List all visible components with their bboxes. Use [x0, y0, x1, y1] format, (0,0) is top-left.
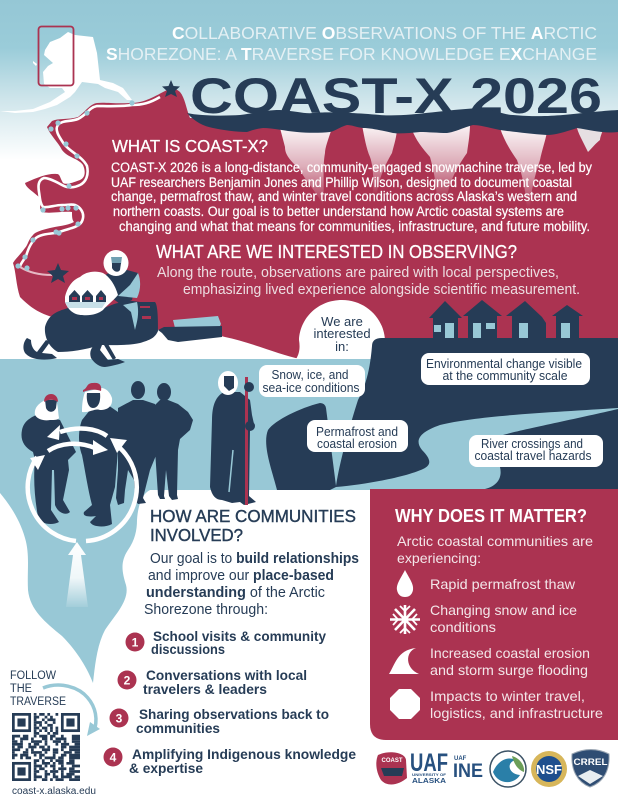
group of people	[21, 371, 256, 526]
logo: UAF: ALASKA	[412, 778, 446, 785]
list item 1: discussions	[151, 641, 225, 657]
text: observing body: Along the route, observations are paired with local perspectives,	[157, 264, 559, 281]
red land mass	[13, 89, 618, 359]
callout: permafrost: Permafrost and	[316, 424, 398, 439]
machine windshield	[65, 272, 118, 315]
text: snow and ice: Changing snow and ice	[430, 602, 577, 618]
list item 2	[118, 667, 307, 697]
icon: star, south end	[47, 263, 69, 283]
text: follow the traverse: FOLLOW	[10, 670, 56, 682]
heading: what are we interested in observing: WHAT ARE WE INTERESTED IN OBSERVING?	[156, 241, 517, 262]
blue lower ground and ice	[0, 359, 380, 683]
text: why intro	[397, 533, 593, 566]
callout: environmental change	[421, 353, 590, 385]
windshield stripe	[65, 302, 106, 308]
list item 1: School visits & community	[153, 628, 326, 644]
text: follow the traverse: THE	[10, 683, 32, 695]
text: snow and ice: conditions	[430, 619, 496, 635]
callout: snow ice	[259, 365, 365, 397]
text: what is coast-x body: COAST-X 2026 is a long-distance, community-engaged snowmachine traverse, led by	[111, 160, 592, 175]
up arrow	[66, 542, 88, 607]
heading: what is coast-x: WHAT IS COAST-X?	[112, 136, 268, 156]
icon: wave	[389, 648, 419, 674]
callout: permafrost	[307, 420, 408, 452]
navy wave band	[187, 108, 618, 135]
speech bubble: we are interested in: We are	[321, 314, 363, 329]
sky background	[0, 0, 618, 160]
logo: NSF: NSF	[536, 762, 562, 777]
list item 3: Sharing observations back to	[139, 706, 329, 722]
text: what is coast-x body: change, permafrost thaw, and winter travel conditions across Alaska’s western and	[111, 189, 577, 204]
arrow: to qr code	[43, 685, 100, 736]
logo: UAF	[410, 749, 448, 785]
heading: how are communities involved	[150, 506, 356, 545]
text: what is coast-x body: changing and what that means for communities, infrastructure, and future mobility.	[119, 219, 590, 234]
subtitle: SHOREZONE: A TRAVERSE FOR KNOWLEDGE EXCHANGE	[106, 44, 597, 64]
logo: UAF: UNIVERSITY OF	[412, 772, 447, 777]
list item 3	[110, 706, 329, 736]
text: follow the traverse	[10, 670, 66, 708]
icon: stop sign octagon	[390, 689, 420, 719]
logo: NSF	[531, 751, 567, 787]
list item 2: travelers & leaders	[143, 681, 267, 697]
qr code	[12, 714, 80, 780]
callout: snow ice: Snow, ice, and	[272, 367, 348, 382]
panel: why does it matter	[370, 489, 618, 740]
text: snow and ice	[430, 602, 577, 635]
text: coastal erosion: Increased coastal erosion	[430, 645, 590, 661]
list item 3: 3	[116, 712, 123, 726]
heading: how are communities involved: INVOLVED?	[150, 525, 243, 545]
list item 4: 4	[110, 750, 117, 764]
text: winter travel: Impacts to winter travel,	[430, 688, 585, 704]
text: permafrost thaw: Rapid permafrost thaw	[430, 576, 576, 592]
logo: CRREL	[572, 750, 609, 787]
text: winter travel	[430, 688, 603, 721]
list item 4: Amplifying Indigenous knowledge	[132, 746, 356, 762]
list item 2: Conversations with local	[146, 667, 307, 683]
text: observing body	[157, 264, 580, 298]
text: goal paragraph: Shorezone through:	[144, 601, 268, 618]
houses	[429, 300, 583, 338]
speech bubble: we are interested in	[296, 300, 385, 359]
text: goal paragraph	[144, 550, 359, 618]
text: goal paragraph: and improve our place-based	[148, 567, 334, 584]
logo: INE: INE	[453, 761, 483, 782]
person 2	[79, 383, 118, 526]
logo: CRREL: CRREL	[574, 757, 608, 768]
text: observing body: emphasizing lived experience alongside scientific measurement.	[183, 281, 580, 298]
qr caption: coast-x.alaska.edu	[12, 786, 96, 797]
text: what is coast-x body	[111, 160, 592, 234]
logo: coast-x: COAST	[382, 758, 403, 764]
text: why intro: experiencing:	[397, 550, 481, 566]
heading: how are communities involved: HOW ARE COMMUNITIES	[150, 506, 356, 526]
logo: UAF: UAF	[410, 749, 448, 777]
text: why intro: Arctic coastal communities are	[397, 533, 593, 549]
text: coastal erosion: and storm surge flooding	[430, 662, 588, 678]
text: what is coast-x body: northern coasts. Our goal is to better understand how Arctic coastal systems are	[113, 204, 564, 219]
panel: how are communities involved	[104, 506, 359, 776]
rider	[102, 250, 140, 330]
text: goal paragraph: Our goal is to build relationships	[150, 550, 359, 567]
person 4	[150, 383, 193, 500]
text: winter travel: logistics, and infrastructure	[430, 705, 603, 721]
list item 1: 1	[132, 636, 139, 650]
text: goal paragraph: understanding of the Arctic	[146, 584, 325, 601]
callout: snow ice: sea-ice conditions	[262, 380, 360, 395]
subtitle	[106, 23, 597, 64]
small houses on windshield	[69, 290, 106, 302]
machine body	[45, 300, 158, 352]
console lines	[140, 306, 151, 319]
river	[330, 408, 618, 490]
callout: environmental change: Environmental change visible	[426, 356, 582, 371]
main title: COAST-X 2026	[190, 68, 602, 124]
subtitle: COLLABORATIVE OBSERVATIONS OF THE ARCTIC	[172, 23, 597, 43]
machine skis	[23, 338, 125, 367]
text: what is coast-x body: UAF researchers Benjamin Jones and Phillip Wilson, designed to document coastal	[111, 175, 572, 190]
person 5 with pole	[210, 371, 256, 505]
icon: star, north end	[162, 80, 180, 97]
person 1	[21, 394, 76, 524]
logo: circular wave seal	[490, 751, 526, 787]
callout: river crossings: coastal travel hazards	[474, 448, 592, 463]
list item 2: 2	[124, 674, 131, 688]
person 3	[116, 381, 158, 505]
text: follow the traverse: TRAVERSE	[10, 696, 66, 708]
sled	[158, 316, 222, 342]
route across the coast	[15, 97, 160, 275]
text: coastal erosion	[430, 645, 590, 678]
speech bubble: we are interested in: interested	[313, 326, 371, 341]
exchange arrows circle	[28, 425, 137, 541]
list item 4	[104, 746, 356, 776]
icon: Alaska map	[0, 26, 132, 113]
list item 1	[126, 628, 326, 657]
callout: river crossings	[469, 435, 603, 467]
ice wedges under band	[280, 124, 547, 208]
logo: coast-x	[376, 752, 407, 784]
heading: why does it matter: WHY DOES IT MATTER?	[395, 506, 587, 526]
callout: river crossings: River crossings and	[481, 436, 583, 451]
icon: snowflake	[390, 605, 420, 634]
navy shoreline land	[266, 338, 618, 490]
icon: water drop	[397, 570, 413, 597]
snowmachine and rider	[23, 250, 222, 367]
logo: INE: UAF	[454, 756, 467, 762]
callout: permafrost: coastal erosion	[317, 436, 397, 451]
list item 4: & expertise	[129, 760, 203, 776]
ice wedge small	[577, 128, 603, 152]
list item 3: communities	[136, 720, 220, 736]
callout: environmental change: at the community scale	[442, 368, 568, 383]
speech bubble: we are interested in: in:	[335, 339, 349, 354]
